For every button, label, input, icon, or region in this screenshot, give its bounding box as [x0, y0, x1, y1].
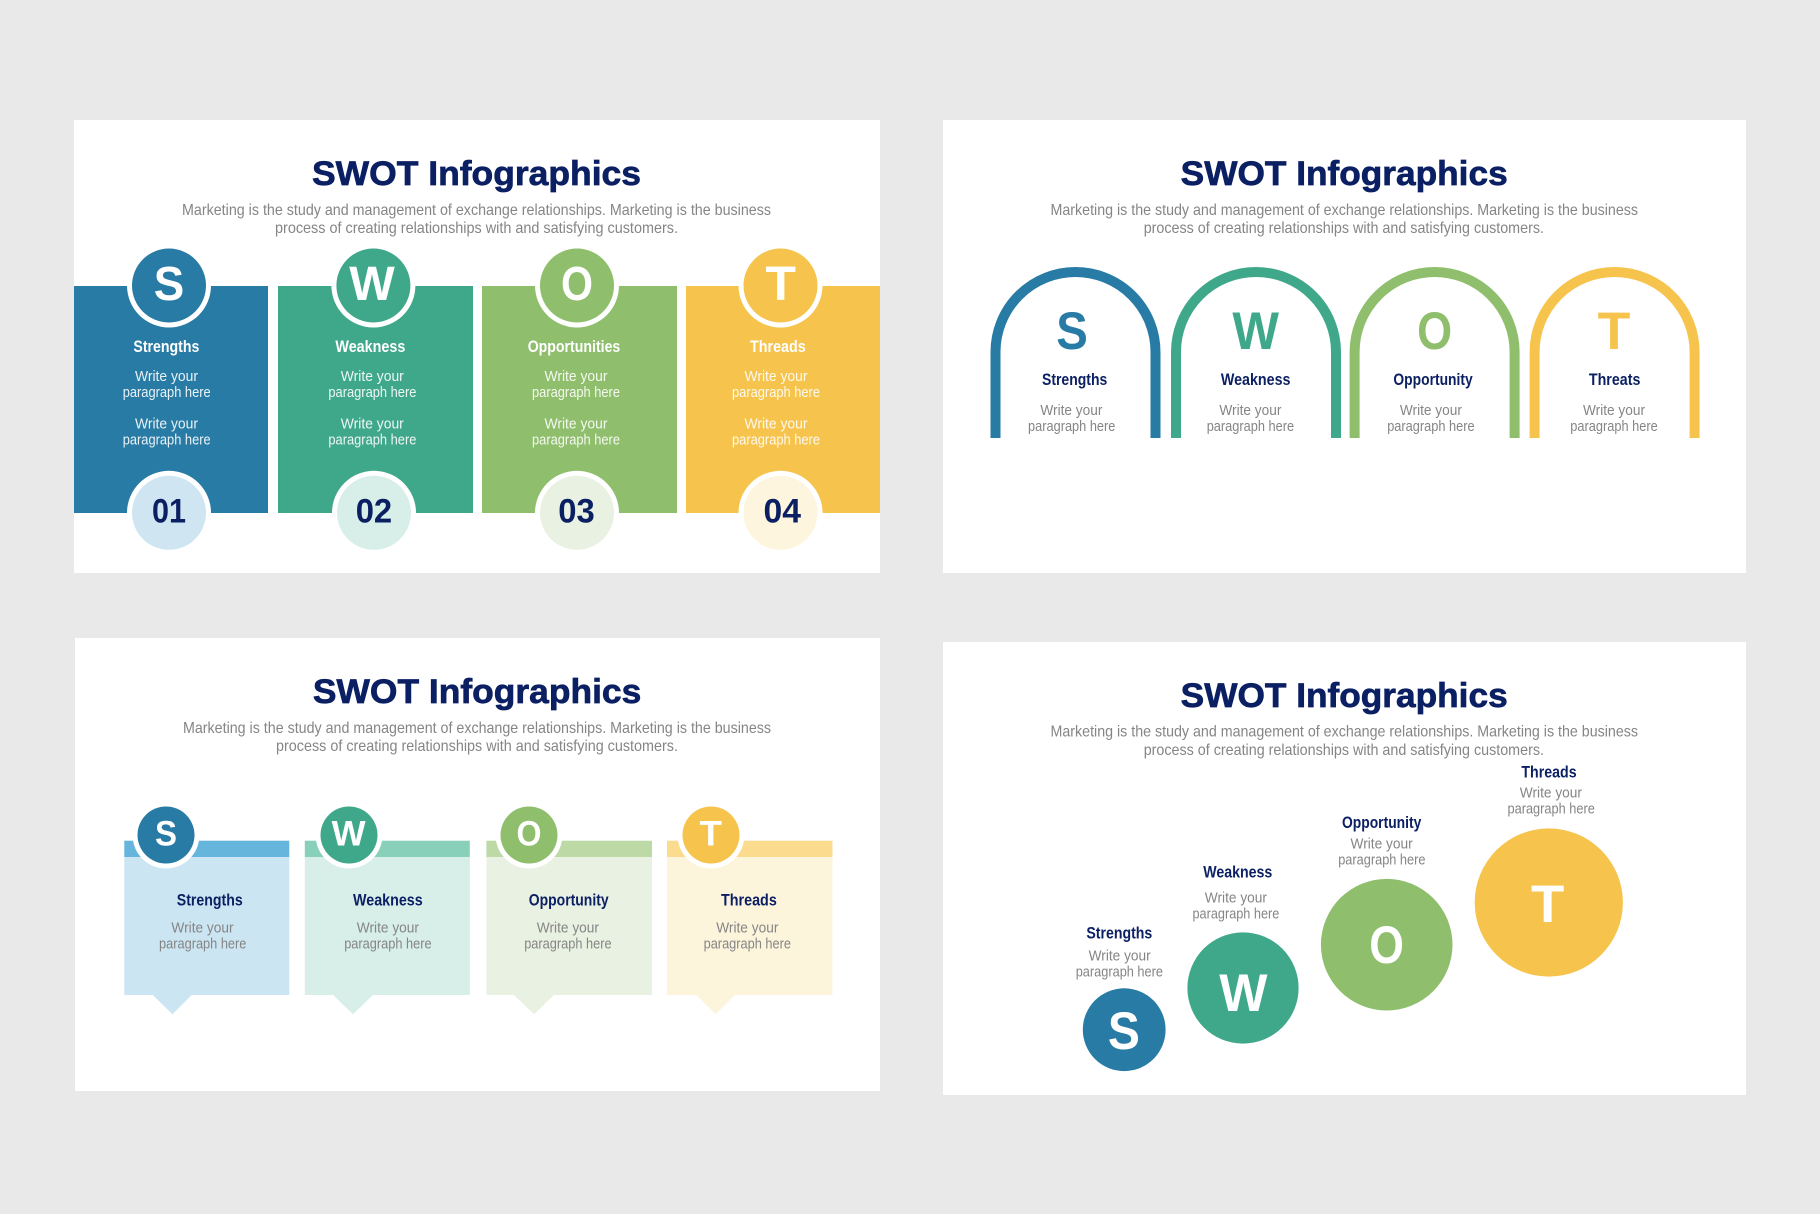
arch: opportunity: [1355, 272, 1515, 438]
intro text: process of creating relationships with and satisfying customers.: [1144, 220, 1544, 237]
heading: SWOT Infographics: [312, 155, 641, 193]
heading: SWOT Infographics: [313, 673, 641, 711]
circle item: threads: T: [1531, 875, 1564, 934]
column: weakness: paragraph here: [328, 432, 416, 449]
card: opportunity: Write your: [537, 919, 599, 936]
circle item: opportunity: [1321, 814, 1452, 1010]
card: strengths: [124, 802, 289, 1014]
intro text: Marketing is the study and management of exchange relationships. Marketing is the business: [1050, 202, 1638, 219]
circle item: opportunity: paragraph here: [1338, 851, 1426, 868]
column: weakness: Write your: [341, 416, 404, 433]
column: strengths: Write your: [135, 368, 198, 385]
card: opportunity: paragraph here: [524, 935, 612, 952]
column: opportunities: 03: [558, 493, 595, 531]
circle item: weakness: W: [1219, 964, 1268, 1023]
circle item: strengths: [1076, 925, 1166, 1071]
card: strengths: Strengths: [177, 891, 243, 909]
card: strengths: Write your: [171, 919, 234, 936]
card: threads: [667, 802, 832, 1014]
intro text: process of creating relationships with and satisfying customers.: [1144, 742, 1544, 759]
arch: threats: T: [1598, 302, 1630, 361]
card: weakness: Weakness: [353, 891, 423, 909]
arch: weakness: paragraph here: [1207, 418, 1294, 435]
heading: SWOT Infographics: [1181, 677, 1508, 715]
circle item: weakness: [1187, 864, 1299, 1044]
arch: strengths: Strengths: [1042, 371, 1107, 389]
circle item: strengths: paragraph here: [1076, 964, 1163, 981]
panel: callout cards: [75, 638, 880, 1091]
arch: threats: Write your: [1583, 402, 1645, 419]
column: opportunities: Write your: [544, 368, 608, 385]
card: opportunity: Opportunity: [529, 891, 609, 909]
arch: weakness: W: [1232, 302, 1279, 361]
column: strengths: paragraph here: [123, 432, 211, 449]
arch: threats: [1535, 272, 1695, 438]
card: weakness: [305, 802, 470, 1014]
panel: arches: [943, 120, 1746, 573]
arch: strengths: Write your: [1040, 402, 1102, 419]
circle item: weakness: Weakness: [1203, 864, 1272, 882]
intro text: [1050, 724, 1638, 759]
intro text: Marketing is the study and management of exchange relationships. Marketing is the business: [182, 202, 771, 219]
column: weakness: paragraph here: [328, 384, 416, 401]
column: weakness: Weakness: [335, 338, 405, 356]
column: strengths: Write your: [135, 416, 198, 433]
arch: strengths: [996, 272, 1156, 438]
panel background: [74, 120, 880, 573]
arch: opportunity: O: [1417, 302, 1452, 361]
circle item: strengths: Write your: [1089, 948, 1151, 965]
column: threads: Write your: [744, 416, 808, 433]
panel: column cards: [74, 120, 880, 573]
circle item: weakness: Write your: [1205, 890, 1267, 907]
heading: SWOT Infographics: [1181, 155, 1508, 193]
column: strengths: [74, 244, 268, 555]
intro text: Marketing is the study and management of exchange relationships. Marketing is the business: [1050, 724, 1638, 741]
column: opportunities: paragraph here: [532, 384, 620, 401]
column: weakness: Write your: [341, 368, 404, 385]
circle item: opportunity: Write your: [1350, 835, 1413, 852]
column: threads: [686, 244, 880, 555]
card: threads: Write your: [716, 919, 778, 936]
column: threads: Write your: [744, 368, 808, 385]
column: strengths: paragraph here: [123, 384, 211, 401]
arch: opportunity: Opportunity: [1393, 371, 1473, 389]
panel: growing circles: [943, 642, 1746, 1095]
column: weakness: [278, 244, 473, 555]
arch: strengths: S: [1056, 302, 1088, 361]
column: threads: Threads: [750, 338, 806, 356]
card: threads: T: [700, 814, 722, 853]
arch: threats: Threats: [1589, 371, 1640, 389]
circle item: threads: paragraph here: [1508, 801, 1595, 818]
circle item: threads: Write your: [1520, 785, 1582, 802]
intro text: [1050, 202, 1638, 237]
intro text: process of creating relationships with and satisfying customers.: [275, 220, 678, 237]
intro text: process of creating relationships with and satisfying customers.: [276, 738, 678, 755]
panel background: [943, 120, 1746, 573]
card: opportunity: [486, 802, 652, 1014]
intro text: Marketing is the study and management of exchange relationships. Marketing is the business: [183, 720, 771, 737]
column: opportunities: Opportunities: [528, 338, 620, 356]
arch: weakness: Weakness: [1221, 371, 1290, 389]
card: weakness: paragraph here: [344, 935, 432, 952]
column: opportunities: [482, 244, 677, 555]
arch: opportunity: Write your: [1400, 402, 1462, 419]
panel background: [75, 638, 880, 1091]
arch: weakness: Write your: [1219, 402, 1281, 419]
intro text: [182, 202, 771, 237]
card: threads: paragraph here: [704, 935, 791, 952]
column: threads: paragraph here: [732, 384, 820, 401]
card: strengths: S: [155, 814, 177, 853]
column: threads: 04: [764, 493, 801, 531]
panel background: [943, 642, 1746, 1095]
circle item: weakness: paragraph here: [1192, 906, 1279, 923]
circle item: strengths: S: [1108, 1002, 1140, 1061]
card: threads: Threads: [721, 891, 777, 909]
column: weakness: W: [349, 258, 395, 311]
arch: weakness: [1176, 272, 1336, 438]
card: opportunity: O: [516, 814, 542, 853]
card: strengths: paragraph here: [159, 935, 246, 952]
arch: opportunity: paragraph here: [1387, 418, 1475, 435]
circle item: opportunity: Opportunity: [1342, 814, 1422, 832]
card: weakness: Write your: [357, 919, 419, 936]
column: opportunities: O: [561, 258, 593, 311]
column: threads: T: [766, 258, 796, 311]
circle item: threads: Threads: [1521, 764, 1577, 782]
arch: strengths: paragraph here: [1028, 418, 1115, 435]
intro text: [183, 720, 771, 755]
column: strengths: S: [154, 258, 184, 311]
column: weakness: 02: [356, 493, 392, 531]
column: opportunities: paragraph here: [532, 432, 620, 449]
circle item: opportunity: O: [1369, 916, 1404, 975]
column: strengths: Strengths: [133, 338, 199, 356]
circle item: threads: [1475, 764, 1623, 977]
card: weakness: W: [332, 814, 366, 853]
column: opportunities: Write your: [544, 416, 608, 433]
circle item: strengths: Strengths: [1086, 925, 1152, 943]
arch: threats: paragraph here: [1570, 418, 1658, 435]
column: threads: paragraph here: [732, 432, 820, 449]
column: strengths: 01: [152, 493, 186, 531]
